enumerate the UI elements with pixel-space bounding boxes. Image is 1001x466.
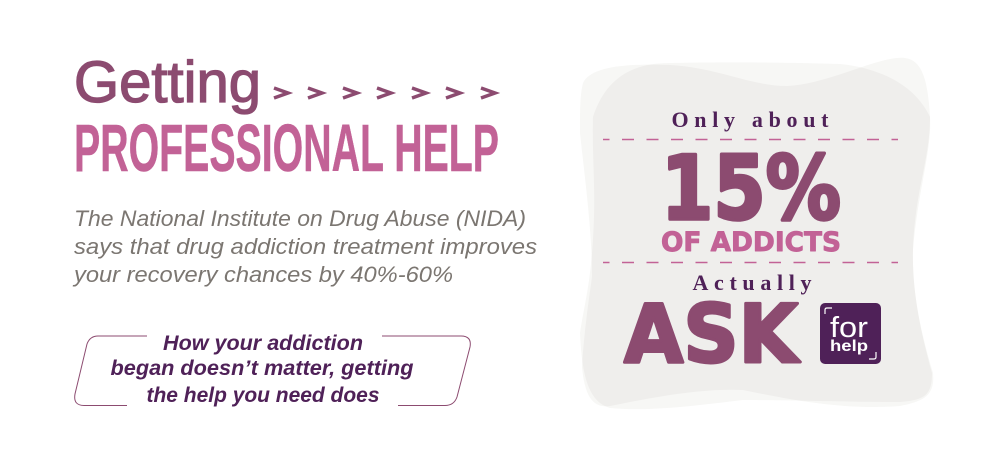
callout text — [110, 332, 414, 407]
callout text: How your addiction — [163, 332, 363, 355]
icon: for help badge: help — [830, 338, 868, 355]
heading: Getting: Getting — [74, 50, 261, 115]
text: Only about: Only about — [672, 107, 829, 132]
callout text: began doesn’t matter, getting — [110, 357, 414, 380]
text: ASK: ASK — [624, 288, 801, 381]
callout text: the help you need does — [146, 384, 380, 407]
text: Actually: Actually — [692, 270, 812, 295]
dashed divider bottom — [603, 262, 898, 264]
callout frame — [75, 336, 470, 406]
dashed divider top — [603, 138, 898, 140]
body paragraph: says that drug addiction treatment improves — [74, 234, 537, 259]
panel: blob background — [580, 58, 933, 409]
icon: for help badge — [820, 303, 881, 364]
heading: Professional Help: PROFESSIONAL HELP — [74, 111, 499, 186]
body paragraph — [72, 206, 537, 287]
icon: for help badge: for — [830, 312, 868, 344]
stat: 15%: 15% — [661, 137, 841, 240]
text: of addicts: OF ADDICTS — [661, 227, 841, 258]
arrows row — [274, 88, 495, 98]
body paragraph: your recovery chances by 40%-60% — [72, 262, 453, 287]
body paragraph: The National Institute on Drug Abuse (NIDA) — [74, 206, 526, 231]
